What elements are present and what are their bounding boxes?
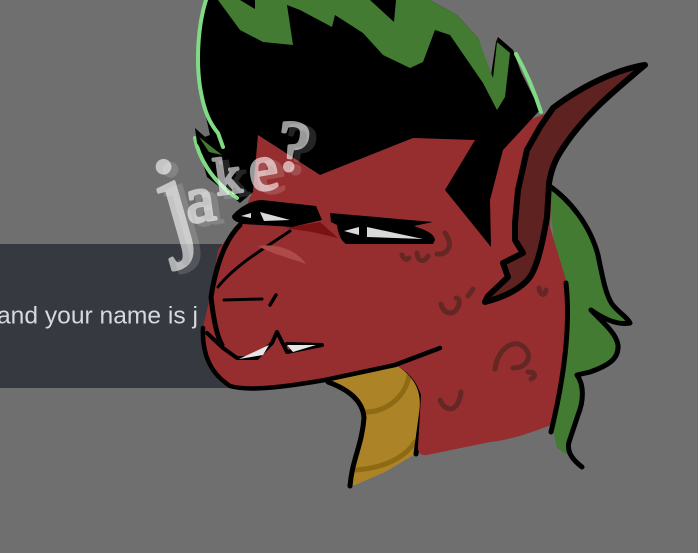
right mane fill [548, 185, 630, 455]
left eye [232, 200, 322, 227]
nostril and mouth line [224, 299, 262, 300]
main letters [115, 105, 315, 272]
black hair [196, 0, 540, 247]
main letters: j [115, 132, 215, 272]
main letters: k [211, 147, 244, 207]
green mane crest [218, 0, 510, 110]
snout highlight [258, 245, 306, 264]
main letters: ? [272, 105, 315, 188]
dark red brow shade [285, 222, 338, 238]
head [203, 110, 566, 455]
small left horn tuft [195, 128, 223, 159]
teeth [239, 345, 316, 359]
shadow layer: k [218, 150, 251, 210]
chat message text: and your name is j [0, 302, 198, 330]
shadow layer: e [249, 133, 290, 210]
main letters: a [180, 161, 219, 238]
handwritten text: jake? [115, 105, 322, 275]
shadow layer [122, 108, 322, 275]
right eye [330, 213, 435, 244]
scale marks [402, 233, 546, 409]
neck right edge line [551, 283, 567, 432]
shadow layer: a [187, 164, 226, 241]
shadow layer: ? [279, 108, 322, 191]
horn ear [485, 65, 645, 302]
mane outline glow [195, 0, 541, 198]
neck scales [325, 366, 422, 487]
shadow layer: j [122, 135, 222, 275]
chat message panel [0, 244, 240, 388]
right mane outline [548, 185, 630, 467]
jaw and mouth outline [203, 225, 440, 388]
main letters: e [242, 130, 283, 207]
